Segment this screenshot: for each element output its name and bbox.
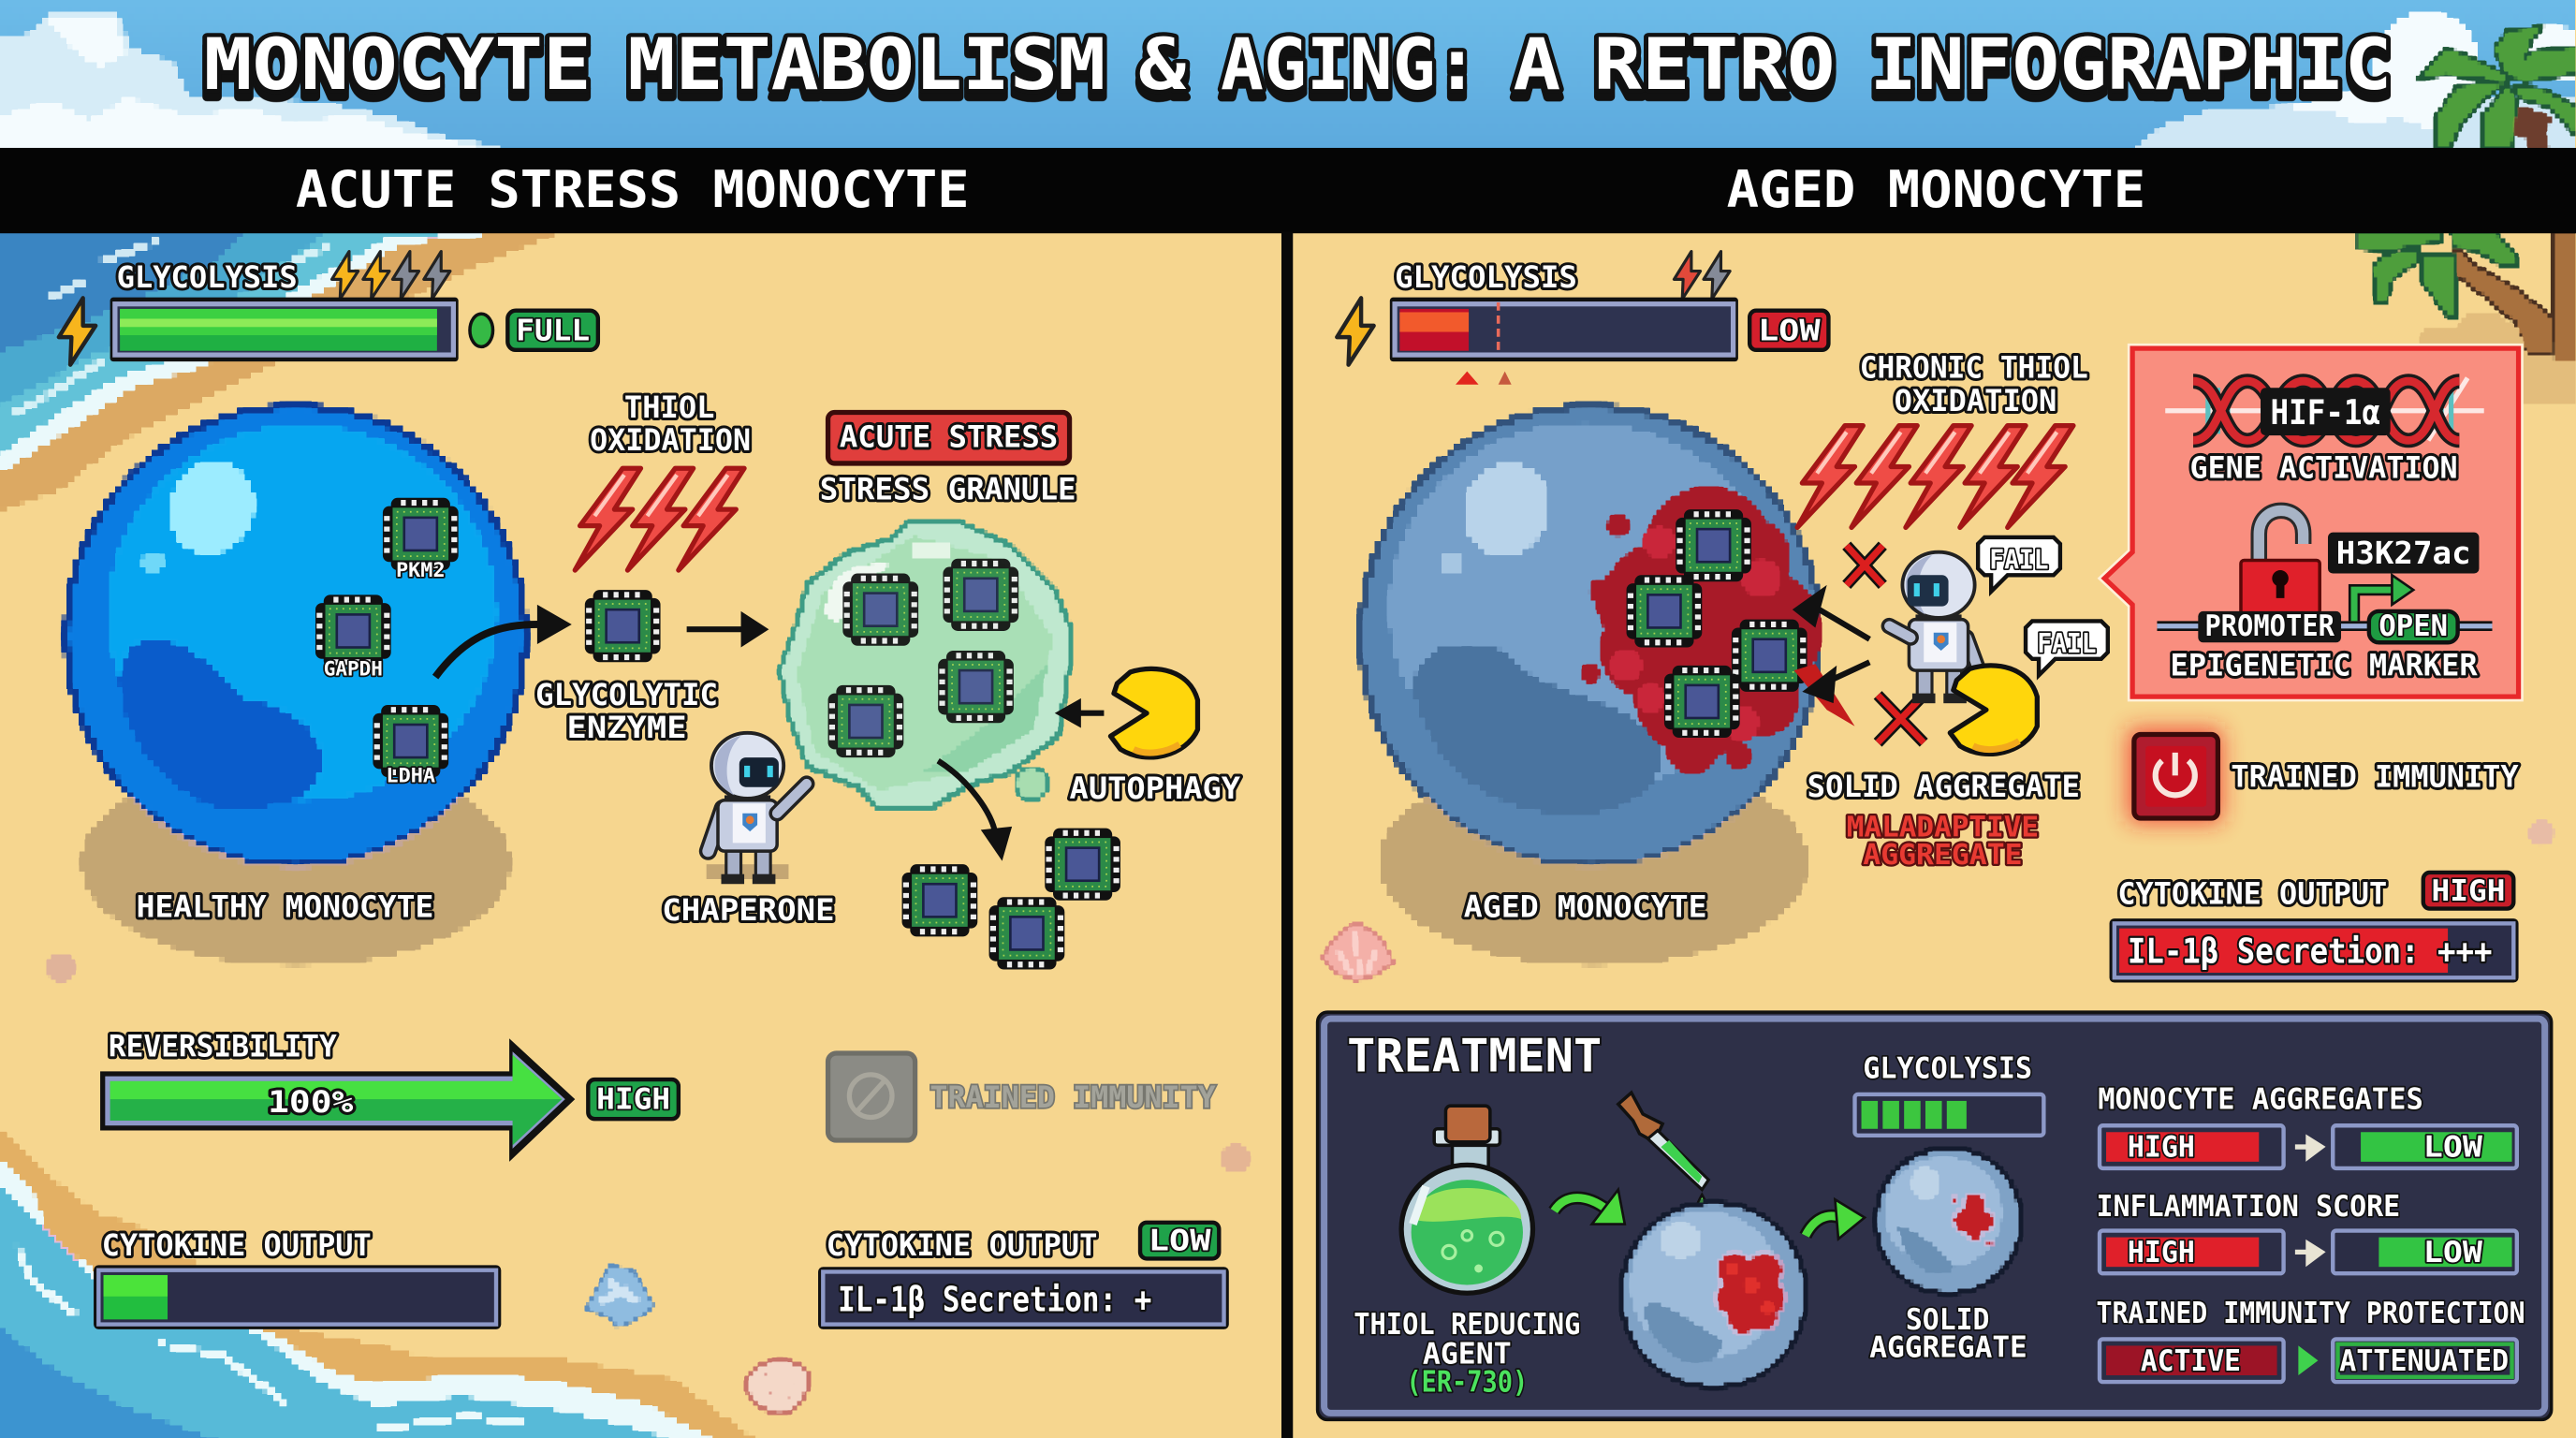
inflammation score comparison xyxy=(2097,1190,2517,1273)
cytokine output readout: IL-1β Secretion: + xyxy=(838,1280,1151,1320)
solid aggregate xyxy=(1582,488,1821,772)
potion flask: thiol reducing agent: (ER-730) xyxy=(1406,1366,1528,1400)
monocyte aggregates comparison xyxy=(2098,1083,2517,1168)
chronic thiol oxidation: OXIDATION xyxy=(1895,383,2056,418)
promoter line with open state: PROMOTER xyxy=(2204,609,2334,643)
arrow: enzyme leaves cell xyxy=(435,605,572,677)
inflammation score comparison: LOW xyxy=(2423,1236,2483,1269)
glycolysis meter, full: FULL xyxy=(516,314,590,347)
fail bubbles: FAIL xyxy=(1989,544,2049,575)
trained immunity protection comparison: ACTIVE xyxy=(2141,1344,2241,1378)
trained immunity protection comparison xyxy=(2097,1297,2525,1382)
title: INFOGRAPHIC xyxy=(1869,23,2392,106)
glycolysis meter, full xyxy=(59,252,598,365)
failed arrows to aggregate xyxy=(1793,585,1869,726)
inflammation score comparison: INFLAMMATION SCORE xyxy=(2097,1190,2400,1224)
glycolytic enzyme xyxy=(535,590,718,745)
thiol oxidation: OXIDATION xyxy=(590,422,751,458)
glycolytic enzyme: GLYCOLYTIC xyxy=(535,677,718,712)
cytokine output readout, high: IL-1β Secretion: +++ xyxy=(2128,931,2492,971)
palm tree on the right panel xyxy=(2359,233,2576,403)
panel: treatment xyxy=(1318,1012,2552,1419)
chip: LDHA: LDHA xyxy=(386,763,435,786)
solid aggregate labels: SOLID AGGREGATE xyxy=(1808,769,2080,804)
monocyte aggregates comparison: HIGH xyxy=(2128,1131,2195,1165)
healthy monocyte cell xyxy=(64,404,527,964)
glycolysis mini meter: GLYCOLYSIS xyxy=(1863,1051,2032,1085)
cytokine output readout: CYTOKINE OUTPUT xyxy=(827,1227,1097,1263)
autophagy pac-man xyxy=(1055,668,1241,806)
trained immunity protection comparison: TRAINED IMMUNITY PROTECTION xyxy=(2097,1297,2525,1330)
seashells xyxy=(48,955,1249,1413)
arrow: granule releases enzymes xyxy=(938,761,1012,861)
treated cell with aggregate xyxy=(1620,1201,1808,1388)
recovered cell xyxy=(1875,1147,2023,1295)
failing autophagy pac-man xyxy=(1950,666,2037,754)
inflammation score comparison: HIGH xyxy=(2128,1236,2195,1269)
title: AGING: xyxy=(1221,23,1479,106)
trained immunity, inactive xyxy=(828,1053,1216,1140)
potion flask: thiol reducing agent: AGENT xyxy=(1423,1338,1512,1372)
cytokine output bar xyxy=(94,1227,501,1329)
monocyte aggregates comparison: LOW xyxy=(2423,1131,2483,1165)
label: solid aggregate: SOLID xyxy=(1906,1303,1989,1337)
red X marks xyxy=(1847,546,1924,742)
chronic thiol oxidation xyxy=(1797,350,2088,527)
seashells xyxy=(1325,822,2553,979)
acute stress tag xyxy=(828,413,1070,463)
solid aggregate labels xyxy=(1808,769,2080,872)
chip: PKM2: PKM2 xyxy=(396,558,446,581)
black header band xyxy=(0,148,2576,233)
cytokine output readout, high xyxy=(2110,873,2519,983)
promoter line with open state xyxy=(2157,575,2492,643)
cytokine output readout: LOW xyxy=(1149,1225,1211,1258)
chip: LDHA xyxy=(373,705,448,786)
failing chaperone robot xyxy=(1889,552,1978,703)
cytokine output readout, high: HIGH xyxy=(2432,874,2506,908)
glycolysis meter, low xyxy=(1337,252,1828,385)
reversibility meter: REVERSIBILITY xyxy=(109,1029,337,1064)
open red lock xyxy=(2241,510,2320,614)
trained immunity, inactive: TRAINED IMMUNITY xyxy=(929,1079,1216,1115)
glycolysis meter, low: GLYCOLYSIS xyxy=(1395,259,1577,295)
dropper xyxy=(1618,1093,1711,1232)
reversibility meter xyxy=(100,1029,679,1162)
label: solid aggregate: AGGREGATE xyxy=(1869,1331,2027,1365)
cytokine output readout xyxy=(818,1223,1229,1329)
heading: treatment: TREATMENT xyxy=(1347,1028,1602,1082)
chaperone robot xyxy=(662,733,835,928)
fail bubbles xyxy=(1978,537,2108,675)
glycolysis mini meter xyxy=(1855,1051,2043,1136)
chip: PKM2 xyxy=(383,498,459,581)
DNA helix with HIF-1a xyxy=(2165,378,2484,440)
title: MONOCYTE xyxy=(204,23,592,106)
ocean: top left xyxy=(0,233,553,509)
title: RETRO xyxy=(1593,23,1835,106)
potion flask: thiol reducing agent: THIOL REDUCING xyxy=(1354,1308,1580,1342)
panel divider xyxy=(1281,231,1293,1438)
cytokine output readout, high: CYTOKINE OUTPUT xyxy=(2117,875,2387,911)
label: epigenetic marker: EPIGENETIC MARKER xyxy=(2170,647,2478,682)
thiol oxidation: THIOL xyxy=(624,389,714,425)
title xyxy=(204,23,2392,106)
solid aggregate labels: MALADAPTIVE xyxy=(1847,811,2039,844)
palm tree in the sky xyxy=(2422,28,2576,148)
chronic thiol oxidation: CHRONIC THIOL xyxy=(1860,350,2088,386)
label: healthy monocyte: HEALTHY MONOCYTE xyxy=(137,888,433,924)
heading: aged monocyte: AGED MONOCYTE xyxy=(1727,160,2145,219)
solid aggregate labels: AGGREGATE xyxy=(1863,839,2023,872)
reversibility meter: 100% xyxy=(268,1084,354,1120)
refolded enzymes xyxy=(902,829,1120,970)
panel: acute stress monocyte xyxy=(48,252,1249,1413)
title: & xyxy=(1138,23,1187,106)
reversibility meter: HIGH xyxy=(596,1083,670,1117)
heading: acute stress monocyte: ACUTE STRESS MONOCYTE xyxy=(296,160,970,219)
chaperone robot: CHAPERONE xyxy=(662,892,835,928)
promoter line with open state: OPEN xyxy=(2378,609,2448,643)
title: METABOLISM xyxy=(627,23,1105,106)
monocyte aggregates comparison: MONOCYTE AGGREGATES xyxy=(2098,1083,2423,1117)
fail bubbles: FAIL xyxy=(2037,628,2097,659)
autophagy pac-man: AUTOPHAGY xyxy=(1070,770,1241,806)
acute stress tag: ACUTE STRESS xyxy=(840,418,1058,454)
chip: GAPDH: GAPDH xyxy=(324,656,383,680)
glycolysis meter, low: LOW xyxy=(1758,314,1821,347)
panel: aged monocyte xyxy=(1325,252,2553,983)
cytokine output bar: CYTOKINE OUTPUT xyxy=(102,1227,372,1263)
stress granule blob xyxy=(779,520,1073,809)
DNA helix with HIF-1a: HIF-1α xyxy=(2271,392,2380,433)
glycolytic enzyme: ENZYME xyxy=(567,710,687,745)
aged monocyte cell xyxy=(1358,404,1822,964)
label: aged monocyte: AGED MONOCYTE xyxy=(1464,888,1707,924)
title: A xyxy=(1513,23,1560,106)
label: gene activation: GENE ACTIVATION xyxy=(2190,450,2458,486)
panel: gene activation and epigenetics xyxy=(2104,348,2519,697)
green arrow: cell to cell xyxy=(1806,1199,1865,1239)
trained immunity protection comparison: ATTENUATED xyxy=(2339,1344,2509,1378)
ocean: bottom left xyxy=(0,1132,753,1438)
chip: GAPDH xyxy=(315,594,391,680)
label: stress granule: STRESS GRANULE xyxy=(820,472,1076,507)
trained immunity, active xyxy=(2130,729,2519,822)
green arrow: flask to dropper xyxy=(1554,1190,1625,1225)
potion flask: thiol reducing agent xyxy=(1354,1106,1580,1400)
trained immunity, active: TRAINED IMMUNITY xyxy=(2231,759,2519,795)
arrow: to stress granule xyxy=(687,611,768,648)
sky and clouds xyxy=(0,0,2576,151)
glycolysis meter, full: GLYCOLYSIS xyxy=(117,259,298,295)
H3K27ac tag: H3K27ac xyxy=(2336,535,2471,571)
thiol oxidation xyxy=(575,389,751,570)
label: solid aggregate xyxy=(1869,1303,2027,1365)
